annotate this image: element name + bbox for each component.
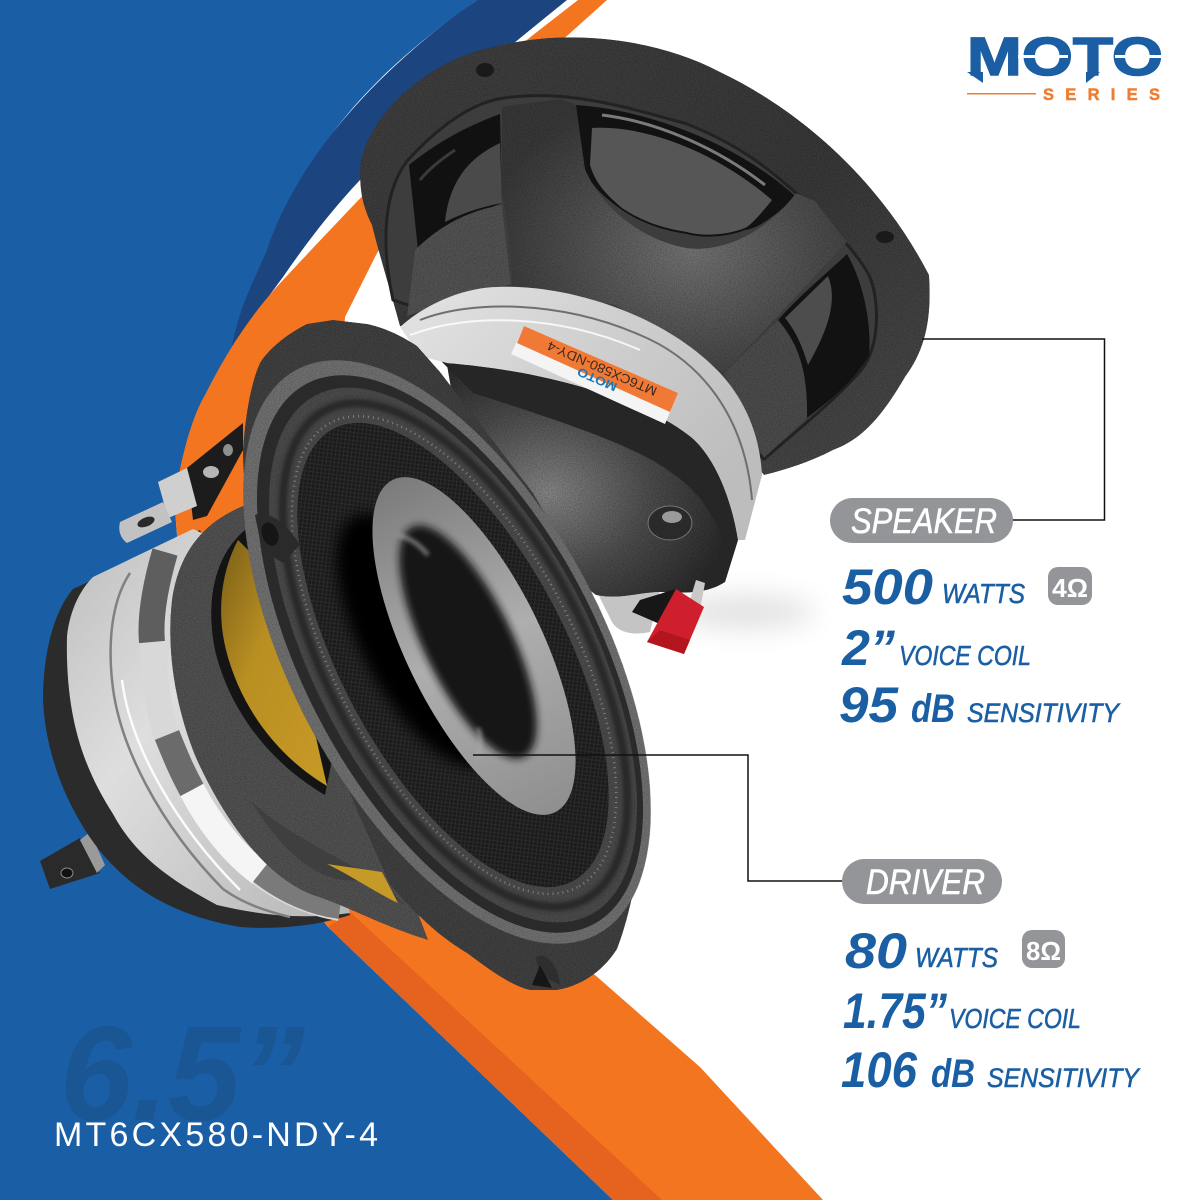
background: orange swoosh [175, 0, 823, 1200]
leader line: driver [473, 755, 842, 881]
driver surround [193, 331, 713, 979]
basket rim ring [170, 506, 428, 940]
logo: MOTO series [967, 27, 1164, 104]
black back plate band [430, 350, 738, 582]
speaker impedance badge [1048, 567, 1092, 605]
driver pill [842, 859, 1002, 904]
logo series text: SERIES [1043, 86, 1160, 104]
frame notch bottom [532, 956, 560, 988]
red terminal [632, 580, 705, 654]
speaker coil label: VOICE COIL [899, 640, 1031, 671]
lower basket band [250, 800, 405, 905]
chrome bright lower segment [192, 790, 260, 873]
driver sensitivity value: 106 [841, 1042, 918, 1098]
product: rear speaker [360, 37, 930, 654]
label logo text: MOTO [575, 365, 619, 394]
background: blue panel [0, 0, 613, 1200]
label model text: MT6CX580-NDY-4 [545, 338, 659, 399]
bracket below dome [596, 590, 660, 634]
driver watts value: 80 [845, 923, 907, 979]
speaker watts label: WATTS [942, 578, 1025, 609]
silver magnet ring [400, 287, 762, 540]
chrome mid segment [167, 735, 192, 790]
product label sticker [511, 326, 678, 424]
magnet back plate [43, 530, 350, 928]
basket outer ring [360, 37, 930, 475]
speaker coil value: 2” [841, 620, 895, 676]
basket screw right [876, 231, 894, 243]
speaker watts value: 500 [842, 559, 933, 615]
dust cap [332, 450, 616, 842]
speaker sensitivity label: SENSITIVITY [967, 698, 1121, 728]
speaker sensitivity unit: dB [911, 687, 955, 731]
section: speaker specs [830, 498, 1121, 733]
yellow kevlar cone lower [327, 864, 398, 903]
basket inner wall [386, 96, 877, 459]
basket interior [211, 530, 340, 795]
logo underline [967, 93, 1036, 94]
right window [778, 254, 870, 418]
size watermark: 6.5” [60, 998, 305, 1149]
back dome [447, 365, 738, 597]
model number: MT6CX580-NDY-4 [54, 1116, 378, 1154]
right basket lobe [724, 320, 807, 458]
driver impedance badge [1022, 930, 1065, 968]
frame notch left [255, 514, 300, 563]
surround roll [212, 350, 698, 960]
chrome ring base [153, 552, 340, 908]
driver groove [177, 315, 723, 993]
leader line: speaker [922, 339, 1104, 520]
rear nub [40, 832, 105, 889]
background: dark orange band [328, 912, 662, 1200]
logo wordmark: MOTO [967, 27, 1163, 87]
driver sensitivity unit: dB [931, 1052, 975, 1096]
left basket lobe [407, 205, 511, 316]
back bolt [648, 506, 692, 540]
dark cone interior [303, 489, 537, 791]
dust cap reflection [398, 535, 480, 760]
driver coil value: 1.75” [843, 983, 947, 1039]
speaker pill [830, 498, 1013, 543]
driver mounting ledge [159, 296, 735, 1008]
yellow kevlar cone upper [221, 540, 327, 786]
driver front frame [243, 320, 644, 990]
speaker sensitivity value: 95 [839, 677, 899, 733]
chrome dark lower segment [260, 873, 340, 908]
dust cap dark center [372, 508, 564, 776]
section: driver specs [841, 859, 1141, 1098]
woven cone [234, 376, 672, 934]
chrome dark reflection top [152, 552, 165, 642]
driver coil label: VOICE COIL [949, 1003, 1081, 1034]
speaker pill label: SPEAKER [851, 502, 997, 541]
surround speckle [225, 367, 683, 943]
rear terminal connector [119, 423, 243, 543]
floor shadow under speaker [675, 596, 815, 628]
driver sensitivity label: SENSITIVITY [987, 1063, 1141, 1093]
speaker impedance badge: 4Ω [1052, 573, 1088, 603]
background: dark blue swoosh [232, 0, 567, 346]
center window [576, 105, 796, 237]
basket screw upper [476, 63, 494, 77]
magnet silver band [67, 529, 350, 917]
basket body and spokes [502, 99, 847, 373]
logo letter cuts and tips [967, 55, 1164, 83]
driver pill label: DRIVER [866, 863, 985, 902]
driver watts label: WATTS [915, 942, 998, 973]
left window [409, 114, 502, 250]
product: front driver [40, 296, 735, 1008]
driver impedance badge: 8Ω [1026, 936, 1061, 966]
